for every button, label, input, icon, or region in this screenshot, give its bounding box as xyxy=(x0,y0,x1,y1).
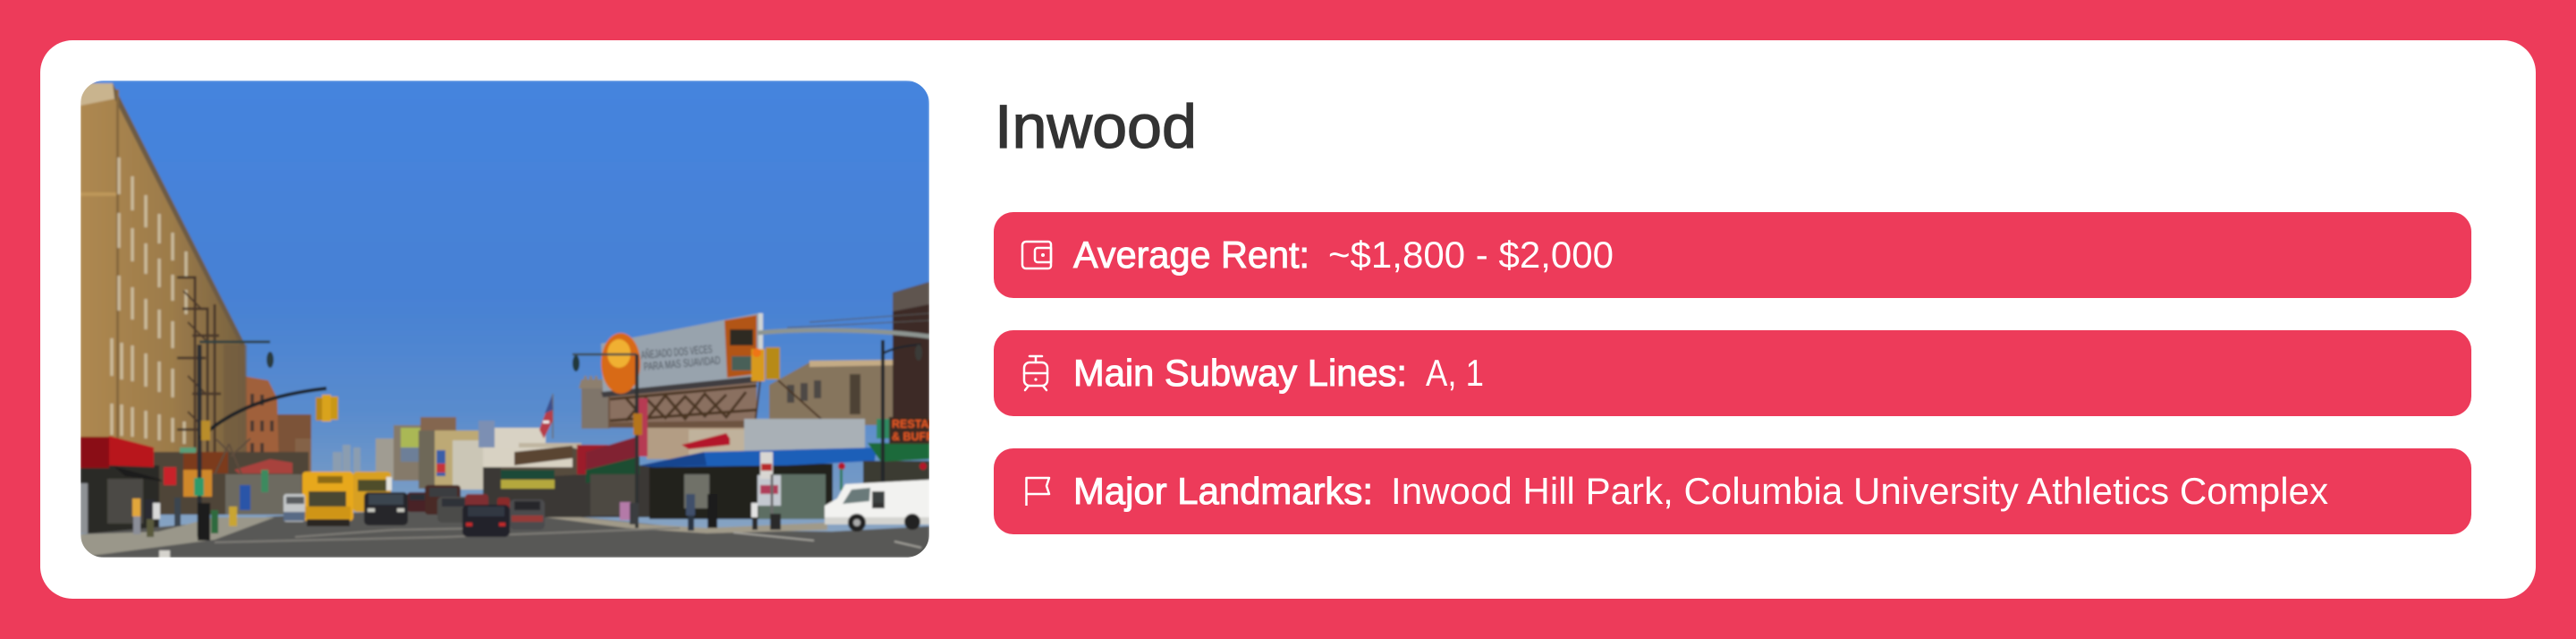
info bar: landmarks xyxy=(994,448,2471,534)
sky xyxy=(80,81,929,558)
photo: Inwood street scene xyxy=(80,81,936,558)
value: lines: A, 1 xyxy=(1426,352,1484,394)
restaurant corner xyxy=(837,416,929,491)
right poles, mast arm and traffic lights xyxy=(572,313,929,528)
fire escapes xyxy=(176,276,222,453)
left street pole and mast arm with traffic light xyxy=(180,342,338,537)
left storefront with red sign xyxy=(80,436,163,533)
yellow school buses xyxy=(302,472,392,526)
icon: flag xyxy=(1027,478,1049,506)
info bar: average rent xyxy=(994,212,2471,298)
label: average rent: Average Rent: xyxy=(1073,234,1309,276)
mid street shops xyxy=(483,436,653,517)
icon: wallet xyxy=(1022,242,1051,268)
sidewalk and road xyxy=(80,510,929,558)
left apartment building xyxy=(80,81,248,455)
pedestrians left xyxy=(132,498,237,541)
billboard slogan: AÑEJADO DOS VECES xyxy=(640,343,713,362)
billboard slogan: PARA MAS SUAVIDAD xyxy=(643,354,721,373)
traffic cars xyxy=(284,485,545,537)
distant skyline xyxy=(333,445,360,474)
windows xyxy=(112,158,186,444)
heading: Inwood xyxy=(995,92,1197,161)
buildings and billboard right xyxy=(579,282,929,429)
dark tower xyxy=(891,302,929,419)
scaffold xyxy=(609,379,822,422)
white van xyxy=(825,480,929,532)
restaurant corner: & BUFF xyxy=(892,430,933,443)
value: landmarks: Inwood Hill Park, Columbia University Athletics Complex xyxy=(1391,470,2328,512)
label: subway lines: Main Subway Lines: xyxy=(1073,352,1407,394)
billboard xyxy=(601,313,758,394)
street shops left xyxy=(152,439,309,515)
orange brick building xyxy=(244,376,279,454)
restaurant corner: RESTAU xyxy=(892,418,936,430)
midground buildings xyxy=(277,414,581,497)
flag xyxy=(539,394,553,439)
info bar: subway lines xyxy=(994,330,2471,416)
icon: tram xyxy=(1024,356,1047,390)
value: rent: ~$1,800 - $2,000 xyxy=(1328,234,1614,276)
label: landmarks: Major Landmarks: xyxy=(1073,470,1373,512)
corner store with blue awning xyxy=(640,419,877,519)
billboard slogan xyxy=(640,344,721,371)
pedestrians right xyxy=(620,494,781,531)
